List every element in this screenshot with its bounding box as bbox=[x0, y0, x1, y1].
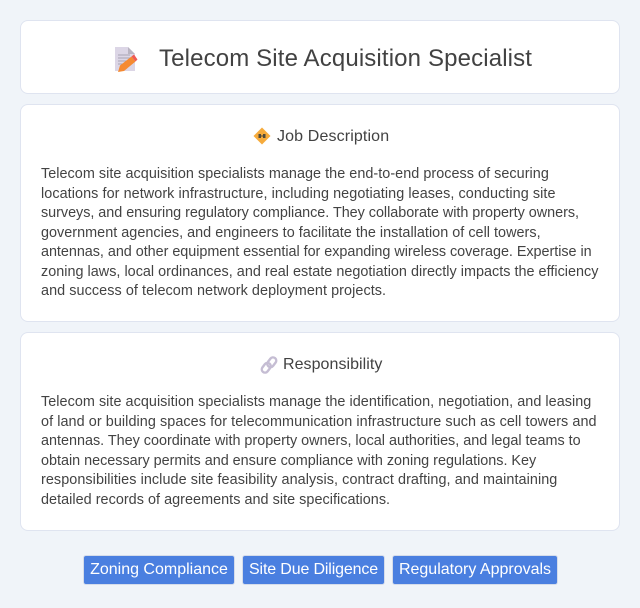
panel: job description bbox=[20, 104, 620, 322]
heading: title: Telecom Site Acquisition Specialist bbox=[159, 44, 532, 72]
tag: zoning compliance bbox=[83, 555, 235, 585]
text block: job description: government agencies, and engineers to facilitate the installation of cell towers, bbox=[41, 224, 541, 240]
tag: regulatory approvals: Regulatory Approvals bbox=[399, 561, 551, 578]
text block: responsibility: responsibilities include site feasibility analysis, contract drafting, and maintaining bbox=[41, 472, 557, 488]
text block: job description: locations for network infrastructure, including negotiating leases, conducting site bbox=[41, 186, 556, 202]
tag: zoning compliance: Zoning Compliance bbox=[90, 561, 228, 578]
text block: responsibility: of land or building spaces for telecommunication infrastructure such as cell towers and bbox=[41, 414, 597, 430]
icon: chain link bbox=[260, 356, 278, 374]
text block: responsibility bbox=[41, 394, 597, 508]
icon: diamond sign bbox=[254, 128, 270, 144]
tag: site due diligence bbox=[242, 555, 385, 585]
text block: responsibility: obtain necessary permits and ensure compliance with zoning regulations. Key bbox=[41, 452, 536, 468]
heading: job description: Job Description bbox=[277, 128, 389, 145]
text block: responsibility: Telecom site acquisition specialists manage the identification, negotiation, and leasing bbox=[41, 394, 591, 410]
text block: job description: Telecom site acquisition specialists manage the end-to-end process of securing bbox=[41, 166, 549, 182]
text block: job description: surveys, and ensuring regulatory compliance. They collaborate with property owners, bbox=[41, 205, 579, 221]
heading: responsibility: Responsibility bbox=[283, 356, 382, 373]
text block: responsibility: antennas. They coordinate with property owners, local authorities, and legal teams to bbox=[41, 433, 581, 449]
tag: site due diligence: Site Due Diligence bbox=[249, 561, 378, 578]
text block: job description: antennas, and other equipment essential for expanding wireless coverage. Expertise in bbox=[41, 244, 592, 260]
panel: title bbox=[20, 20, 620, 94]
text block: job description: zoning laws, local ordinances, and real estate negotiation directly impacts the efficiency bbox=[41, 264, 598, 280]
text block: responsibility: detailed records of agreements and site specifications. bbox=[41, 492, 390, 508]
text block: job description: and success of telecom network deployment projects. bbox=[41, 283, 386, 299]
tag: regulatory approvals bbox=[392, 555, 558, 585]
panel: responsibility bbox=[20, 332, 620, 531]
text block: job description bbox=[41, 166, 598, 299]
icon: document with pencil bbox=[115, 47, 138, 72]
